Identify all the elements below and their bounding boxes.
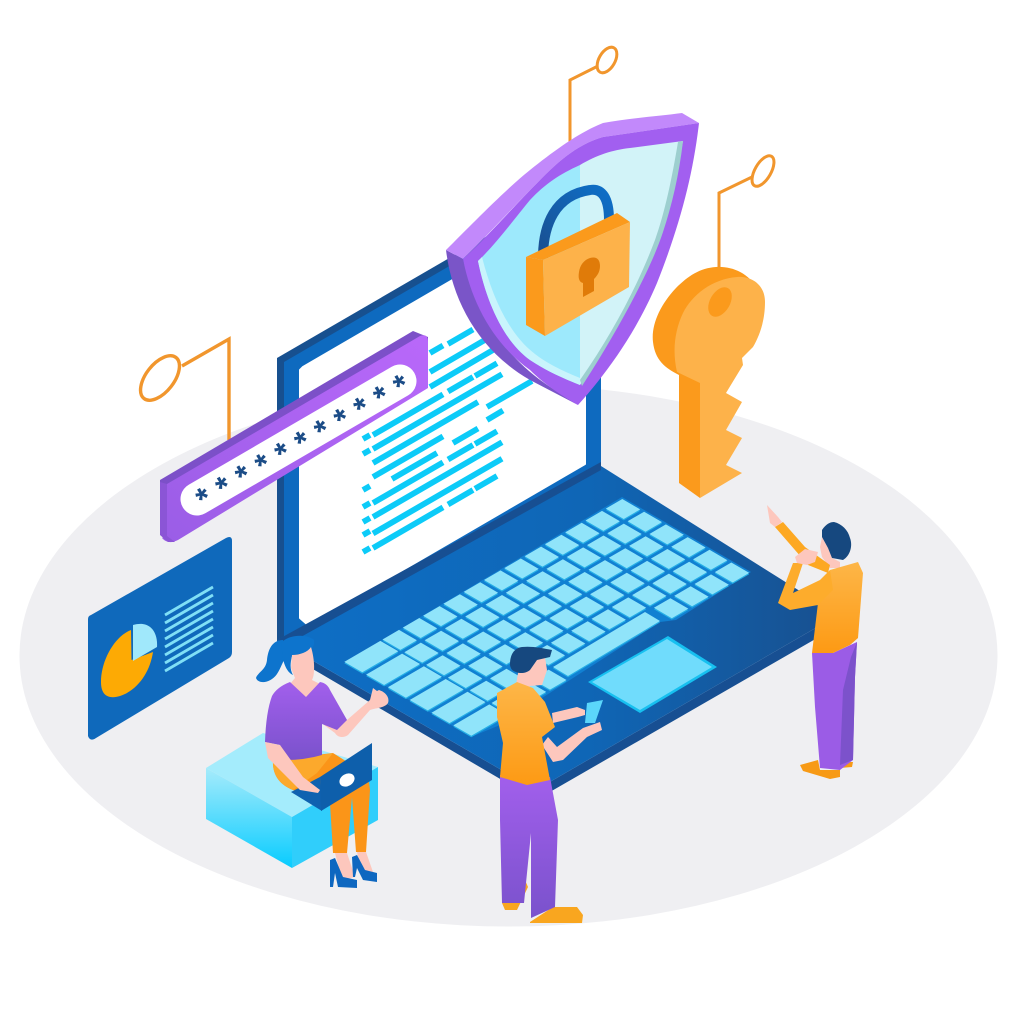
screen text lines (363, 316, 532, 552)
man with phone (497, 647, 603, 923)
hinge (277, 462, 601, 643)
key back (653, 267, 757, 498)
key (653, 267, 765, 498)
password bar (160, 331, 428, 542)
laptop screen white display (300, 203, 585, 625)
key front (675, 277, 765, 498)
man neck and face (516, 657, 547, 692)
cube seat (206, 733, 378, 868)
trackpad (588, 636, 717, 713)
shield front (463, 123, 699, 405)
antenna: shield (570, 44, 621, 146)
laptop keyboard deck (277, 466, 838, 790)
man hair (822, 522, 851, 560)
small laptop (291, 743, 372, 811)
laptop base side (277, 615, 838, 800)
phone (585, 700, 603, 723)
man pointing (767, 505, 863, 779)
shield glass (478, 141, 683, 386)
padlock (526, 190, 630, 336)
laptop (277, 170, 838, 800)
woman lap (273, 753, 333, 790)
woman pants (273, 753, 370, 853)
woman shoes (330, 855, 377, 888)
man shoes (800, 760, 853, 779)
man near arm (778, 563, 833, 610)
antenna: password (133, 339, 229, 440)
panel board (88, 537, 232, 740)
background ellipse (20, 384, 998, 926)
ponytail and hair (256, 636, 314, 682)
woman shirt (265, 682, 347, 760)
man pants (500, 775, 558, 918)
man face (820, 537, 840, 568)
laptop screen frame (277, 170, 601, 645)
woman feet (335, 852, 373, 880)
woman face and neck (290, 647, 320, 698)
man torso (812, 562, 863, 653)
pie chart (101, 624, 157, 697)
man pointing hand (767, 505, 782, 527)
woman arm left (265, 742, 320, 793)
bar front (162, 335, 428, 542)
man far arm (775, 522, 830, 573)
password field (197, 381, 400, 499)
password asterisks: *********** (190, 361, 425, 517)
shield (446, 113, 699, 405)
man hair (510, 647, 552, 673)
woman with laptop (256, 636, 388, 888)
woman arm right (324, 688, 388, 737)
key hole (703, 283, 737, 321)
man front arm (542, 722, 602, 762)
panel text lines (165, 587, 213, 671)
space bar (553, 613, 660, 677)
man shoes (502, 880, 583, 923)
chart panel (88, 537, 232, 740)
shield top rim (446, 113, 699, 259)
keyboard (344, 497, 751, 737)
man near hand (795, 549, 818, 565)
bar top edge (160, 331, 428, 490)
shield left side (446, 250, 578, 405)
man back arm (552, 707, 585, 723)
antenna: key (719, 152, 778, 268)
man shirt (497, 682, 555, 785)
man pants (812, 642, 857, 770)
